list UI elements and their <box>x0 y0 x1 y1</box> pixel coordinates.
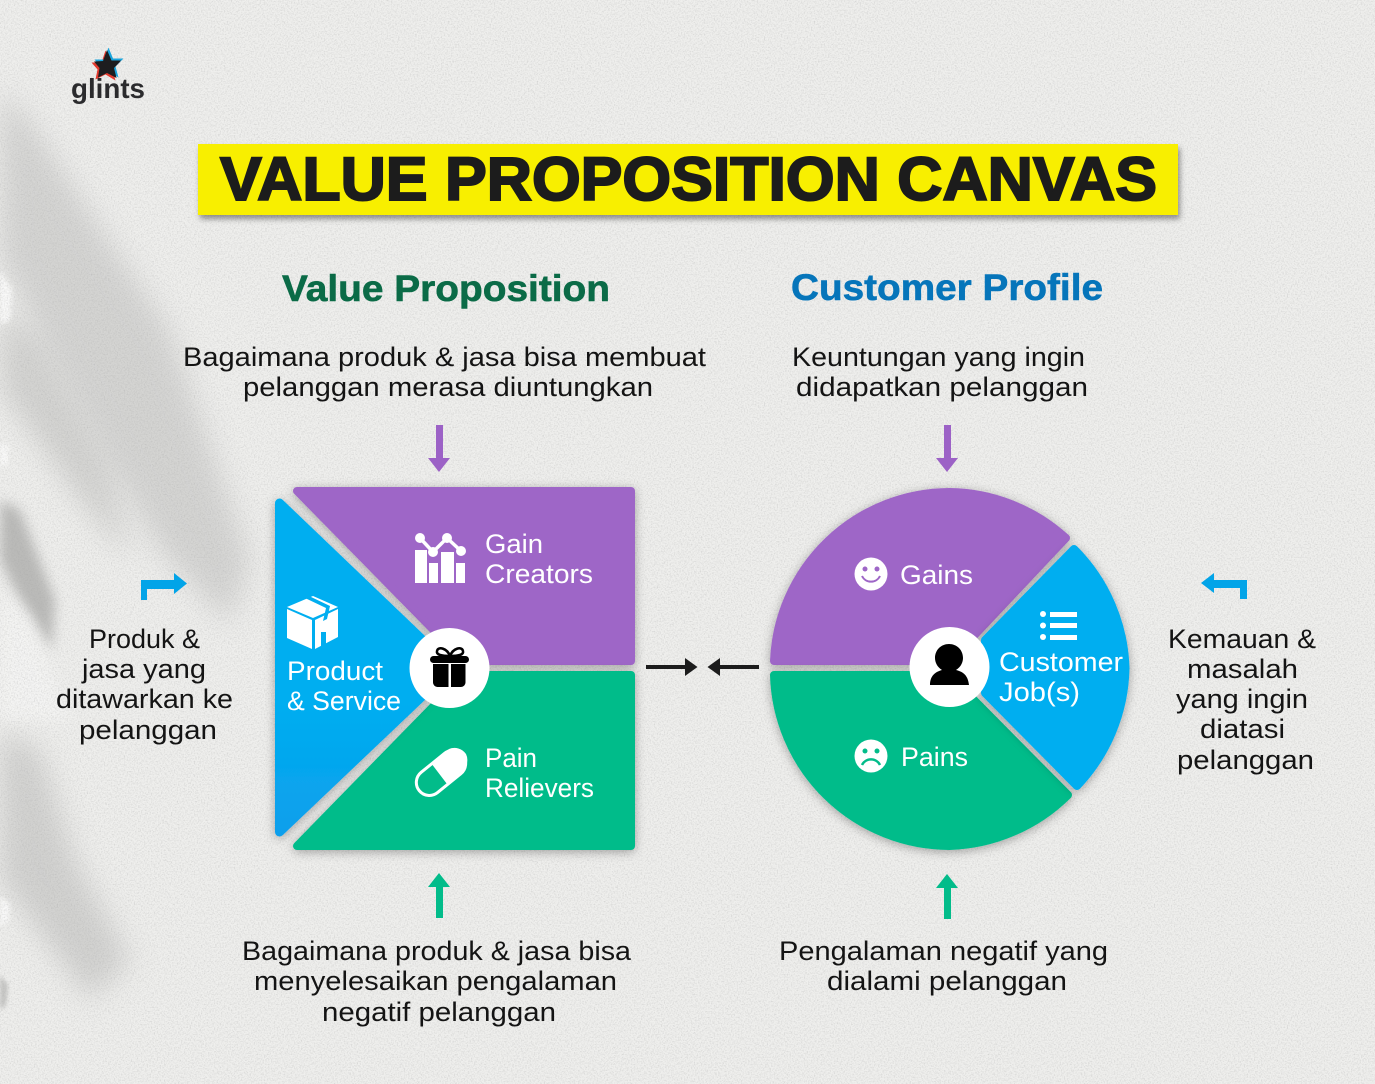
label: pains: Pains <box>901 742 968 772</box>
text: gain creators description <box>183 342 707 402</box>
label: customer jobs: Job(s) <box>999 677 1080 707</box>
label: pain relievers: Pain <box>485 743 537 773</box>
arrow: blue bent right <box>141 573 187 600</box>
text: product description: jasa yang <box>81 654 206 684</box>
segment: customer jobs <box>985 549 1126 786</box>
text: product description: pelanggan <box>79 715 217 745</box>
text: pain relievers description: Bagaimana produk & jasa bisa <box>242 936 632 966</box>
title banner: VALUE PROPOSITION CANVAS <box>220 145 1157 213</box>
icon: pill <box>411 745 471 801</box>
center circle with person icon <box>910 627 990 707</box>
text: customer jobs description: diatasi <box>1200 714 1285 744</box>
label: gains: Gains <box>900 560 973 590</box>
icon: sad face <box>854 740 888 772</box>
text: pain relievers description: menyelesaikan pengalaman <box>254 966 617 996</box>
label: product and service: Product <box>287 656 384 686</box>
segment: product and service <box>280 503 452 832</box>
logo: glints <box>71 48 145 104</box>
panel: customer profile circle <box>774 492 1126 846</box>
text: gains description <box>792 342 1088 402</box>
text: pains description: dialami pelanggan <box>827 966 1067 996</box>
label: product and service <box>287 656 401 716</box>
heading: Customer Profile: Customer Profile <box>791 267 1103 308</box>
icon: box <box>287 596 338 649</box>
text: customer jobs description: yang ingin <box>1176 684 1308 714</box>
arrow: blue bent left <box>1201 573 1247 599</box>
label: customer jobs: Customer <box>999 647 1123 677</box>
segment: gains <box>774 492 1066 661</box>
segment: pains <box>774 675 1068 846</box>
arrow: purple down left <box>428 425 450 472</box>
label: pain relievers: Relievers <box>485 773 594 803</box>
text: pains description: Pengalaman negatif yang <box>779 936 1108 966</box>
text: gain creators description: Bagaimana produk & jasa bisa membuat <box>183 342 707 372</box>
text: gains description: didapatkan pelanggan <box>796 372 1088 402</box>
text: customer jobs description: masalah <box>1187 654 1298 684</box>
text: pains description <box>779 936 1108 996</box>
text: customer jobs description: Kemauan & <box>1168 624 1316 654</box>
heading: Value Proposition: Value Proposition <box>282 268 610 309</box>
label: customer jobs <box>999 647 1123 707</box>
arrow: green up right <box>936 874 958 919</box>
logo: glints: glints <box>71 73 145 104</box>
icon: bar chart with trend line <box>415 533 466 583</box>
panel: value proposition square <box>280 491 631 846</box>
text: pain relievers description: negatif pelanggan <box>322 997 556 1027</box>
arrow: green up left <box>428 873 450 918</box>
icon: list <box>1040 611 1077 640</box>
text: product description <box>56 624 233 745</box>
label: product and service: & Service <box>287 686 401 716</box>
segment: gain creators <box>297 491 631 661</box>
label: gain creators: Creators <box>485 559 593 589</box>
center circle with gift icon <box>410 628 490 708</box>
text: customer jobs description: pelanggan <box>1177 745 1314 775</box>
arrow: black right <box>646 658 698 676</box>
text: product description: ditawarkan ke <box>56 684 233 714</box>
text: customer jobs description <box>1168 624 1316 775</box>
label: gain creators <box>485 529 593 589</box>
text: gains description: Keuntungan yang ingin <box>792 342 1085 372</box>
text: gain creators description: pelanggan merasa diuntungkan <box>243 372 653 402</box>
label: pain relievers <box>485 743 594 803</box>
arrow: black left <box>708 658 759 676</box>
arrow: purple down right <box>936 425 958 472</box>
icon: smiley <box>854 558 888 590</box>
text: product description: Produk & <box>89 624 200 654</box>
segment: pain relievers <box>297 675 631 846</box>
label: gain creators: Gain <box>485 529 543 559</box>
text: pain relievers description <box>242 936 632 1027</box>
